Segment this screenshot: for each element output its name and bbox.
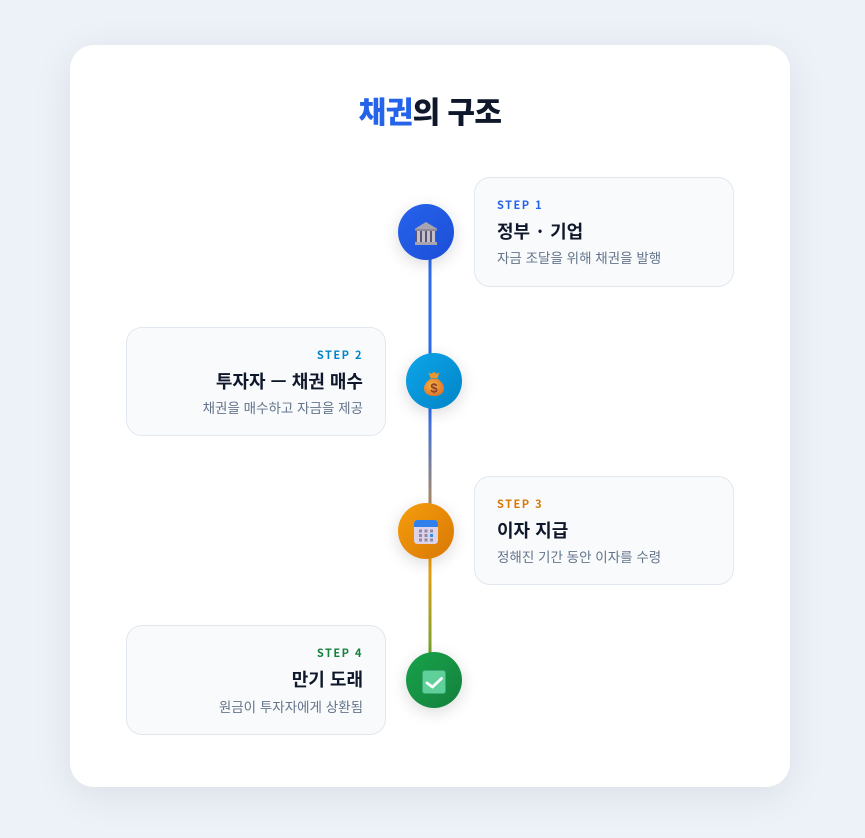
step 4 label: STEP 4 (317, 645, 363, 661)
step 3 description: 정해진 기간 동안 이자를 수령 (497, 546, 661, 566)
step 2 heading: 투자자 — 채권 매수 (216, 368, 363, 394)
step 4 card (126, 625, 386, 735)
title: 채권의 구조 (359, 88, 501, 132)
step 1 description: 자금 조달을 위해 채권을 발행 (497, 247, 661, 267)
step 1 card (474, 177, 734, 287)
step 4 heading: 만기 도래 (292, 666, 363, 692)
icon: check mark on green circle (406, 652, 462, 708)
icon: money bag on sky circle (406, 353, 462, 409)
step 1 heading: 정부 · 기업 (497, 218, 583, 244)
icon: money bag on sky circle: $ (430, 380, 438, 396)
step 3 heading: 이자 지급 (497, 517, 568, 543)
step 4 description: 원금이 투자자에게 상환됨 (219, 696, 363, 716)
step 1 label: STEP 1 (497, 197, 543, 213)
step 3 card (474, 476, 734, 585)
panel: main card (70, 45, 790, 787)
step 2 card (126, 327, 386, 436)
step 2 label: STEP 2 (317, 347, 363, 363)
step 2 description: 채권을 매수하고 자금을 제공 (203, 397, 363, 417)
step 3 label: STEP 3 (497, 496, 543, 512)
icon: calendar on amber circle (398, 503, 454, 559)
timeline connector line (428, 232, 432, 680)
icon: bank on blue circle (398, 204, 454, 260)
